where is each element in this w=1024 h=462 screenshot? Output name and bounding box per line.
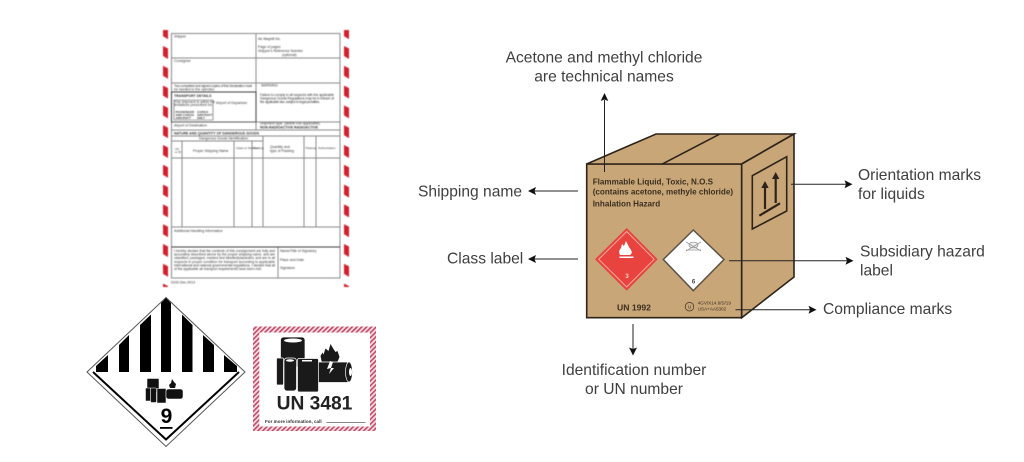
form text: Page of pages — [258, 45, 281, 49]
form text: Place and Date — [280, 258, 304, 262]
box: side face — [742, 134, 794, 318]
class number 9: 9 — [161, 405, 172, 428]
icon: flammable liquid class 3 label: 3 — [625, 274, 629, 280]
form text: Authorization — [318, 146, 336, 150]
arrow: to orientation marks — [791, 180, 852, 188]
red hazard stripes: left and right form edges — [163, 30, 349, 287]
label: orientation marks line 2: for liquids — [858, 186, 925, 203]
compliance marks: USA+AA5302 — [698, 306, 727, 311]
black vertical stripes — [96, 298, 237, 372]
form text: TRANSPORT DETAILS — [174, 94, 212, 98]
form text: Signature — [280, 266, 295, 270]
form text — [171, 34, 336, 284]
arrow: to identification number — [629, 324, 637, 356]
form text: Class or Division — [236, 146, 259, 150]
label: subsidiary hazard: Subsidiary hazard — [860, 244, 985, 261]
form text: CARGO — [197, 110, 209, 114]
label text: UN number: UN 3481 — [277, 394, 353, 414]
form text: Packing — [306, 146, 317, 150]
form text: Quantity and — [270, 145, 290, 149]
box: top face — [587, 134, 794, 164]
form text: Failure to comply in all respects with the applicable — [260, 93, 334, 97]
form text: NATURE AND QUANTITY OF DANGEROUS GOODS — [174, 132, 260, 136]
label: identification number line 2: or UN number — [585, 381, 683, 398]
box text: proper shipping name — [593, 177, 733, 209]
form text: or ID — [175, 150, 181, 154]
form text: respects in proper condition for transport according to applicable — [174, 260, 275, 264]
form text: Two completed and signed copies of this Declaration must — [174, 84, 252, 88]
form text: Shipment type: (delete non-applicable) — [260, 122, 320, 126]
box text: proper shipping name: Flammable Liquid, Toxic, N.O.S — [593, 177, 714, 186]
label: identification number: Identification number — [562, 362, 706, 379]
form text: AIRCRAFT — [176, 116, 191, 120]
label: technical names line 2: are technical names — [534, 69, 674, 86]
form text: (optional) — [282, 53, 297, 57]
icon: flammable liquid class 3 label — [595, 228, 658, 291]
form text: international and national governmental regulations. I declare that all — [174, 263, 275, 267]
form text: Dangerous Goods Identification — [199, 136, 248, 140]
arrow: to subsidiary hazard label — [729, 257, 854, 265]
label text: contact line: For more information, call — [265, 419, 322, 424]
form text: type of Packing — [270, 149, 294, 153]
form text: PASSENGER — [176, 110, 195, 114]
form text: This shipment is within the — [174, 100, 215, 104]
label: class label: Class label — [447, 250, 523, 268]
form text: Name/Title of Signatory — [280, 249, 317, 253]
cardboard box diagram — [587, 134, 794, 318]
form text: UN — [175, 147, 179, 151]
form text: be handed to the operator. — [174, 88, 215, 92]
box text: UN number: UN 1992 — [617, 302, 651, 312]
box: tape line — [662, 134, 719, 164]
label: subsidiary hazard line 2: label — [860, 262, 893, 280]
compliance marks: 4GV/X14.6/S/19 — [698, 300, 731, 305]
panel: dangerous goods declaration form — [163, 30, 349, 287]
form text: Packing — [253, 146, 264, 150]
icon: toxic class 6 label — [663, 230, 724, 291]
icon: orientation arrows — [752, 157, 787, 229]
form text: classified, packaged, marked and labelled/placarded, and are in all — [174, 256, 275, 260]
form text: limitations prescribed for: — [174, 103, 213, 107]
arrow: to shipping name — [528, 187, 578, 195]
form text: ONLY — [197, 116, 205, 120]
box: front face — [587, 164, 742, 318]
form text: Airport of Departure: — [216, 101, 248, 105]
form grid — [172, 33, 340, 278]
box text: proper shipping name: (contains acetone, methyle chloride) — [593, 188, 733, 196]
form text: Shipper's Reference Number — [258, 49, 304, 53]
form text: accurately described above by the proper shipping name, and are — [174, 253, 275, 257]
label: technical names: Acetone and methyl chloride — [506, 50, 702, 67]
icon: batteries and flame — [146, 378, 183, 403]
form text: AND CARGO — [176, 113, 195, 117]
form text: Proper Shipping Name — [193, 149, 228, 153]
label: orientation marks: Orientation marks — [858, 167, 981, 184]
form text: Consignee — [174, 59, 191, 63]
form text: Additional Handling Information — [174, 229, 223, 233]
compliance marks — [685, 300, 731, 311]
form text: Shipper — [174, 34, 187, 38]
arrow: to class label — [528, 255, 578, 263]
form text: Air Waybill No. — [258, 37, 281, 41]
form text: I hereby declare that the contents of this consignment are fully and — [174, 249, 275, 253]
label: shipping name: Shipping name — [418, 184, 522, 200]
arrow: to compliance marks — [736, 306, 816, 314]
icon: batteries and flame — [276, 337, 352, 392]
icon: UN 3481 lithium battery label — [253, 326, 376, 431]
form text: of the applicable air transport requirements have been met. — [174, 267, 262, 271]
form text: the applicable law, subject to legal penalties. — [260, 100, 320, 104]
form text: Airport of Destination: — [174, 124, 208, 128]
arrow: to technical names label — [601, 93, 608, 172]
icon: toxic class 6 label: 6 — [692, 280, 696, 286]
box text: proper shipping name: Inhalation Hazard — [593, 200, 660, 209]
icon: class 9 hazard diamond — [87, 298, 245, 446]
form text: DGD-Dec-0013 — [171, 280, 195, 284]
compliance marks: u — [688, 305, 691, 311]
form text: Dangerous Goods Regulations may be in breach of — [260, 96, 334, 100]
label: compliance marks: Compliance marks — [823, 301, 952, 318]
form text: AIRCRAFT — [197, 113, 212, 117]
form text: WARNING — [261, 84, 278, 88]
form text: NON-RADIOACTIVE RADIOACTIVE — [260, 126, 319, 130]
